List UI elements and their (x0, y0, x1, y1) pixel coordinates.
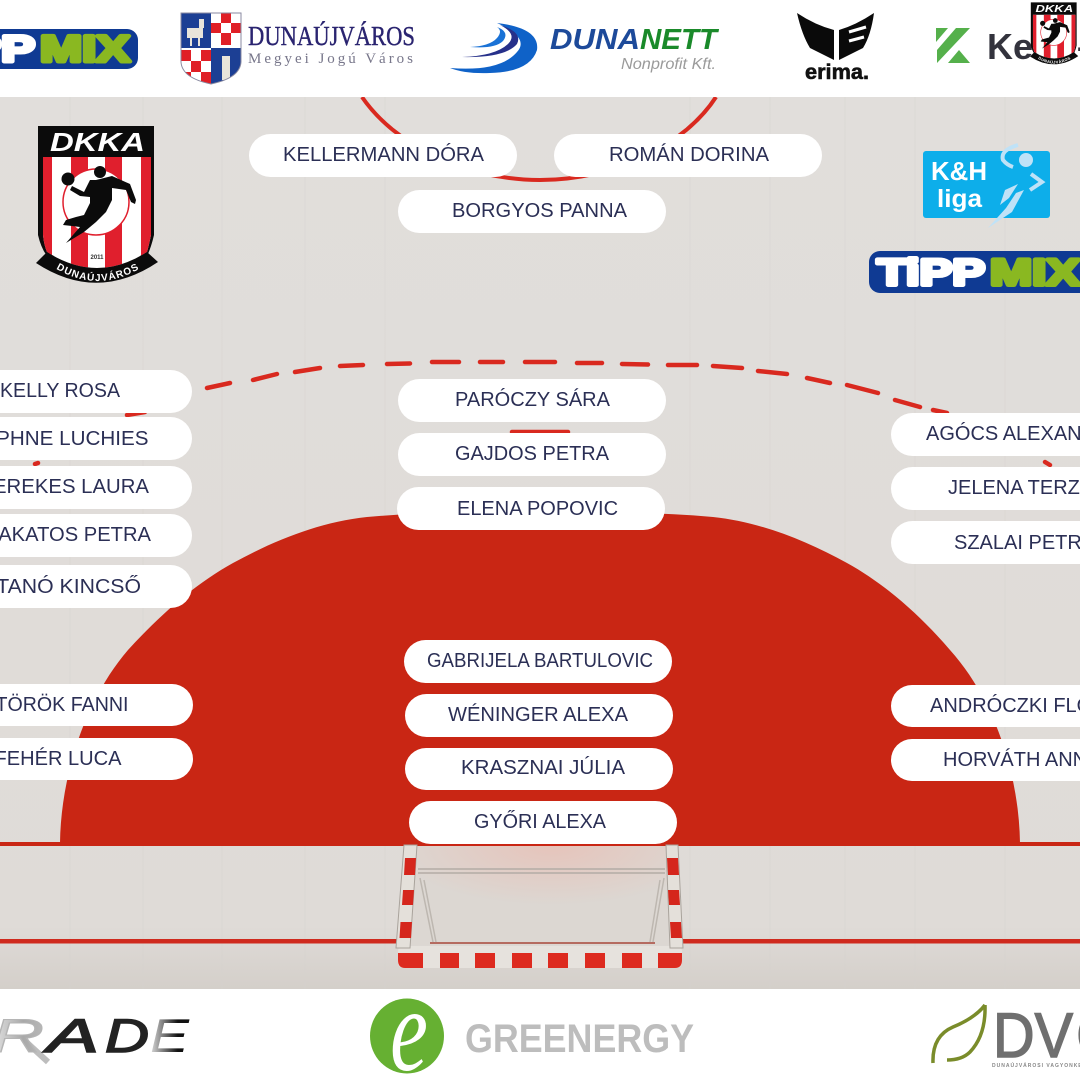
player: Krasznai Júlia (405, 748, 673, 790)
logo: Ke green mark: Ke (987, 26, 1033, 67)
player: Gabrijela Bartulovic (404, 640, 672, 683)
logo: Greenergy wordmark: GREENERGY (465, 1017, 694, 1061)
logo: DVG: DV (993, 1001, 1073, 1071)
bottom sponsor band (0, 965, 1080, 1080)
logo: Tippmix right: TiPP (877, 252, 985, 293)
player: Andróczki Flóra (891, 685, 1080, 727)
logo: Dunanett swoosh (450, 23, 537, 73)
logo: Tippmix right (869, 251, 1080, 293)
logo: Trade: A (42, 1009, 99, 1062)
player: Krasznai Júlia: KRASZNAI JÚLIA (461, 756, 626, 779)
logo: Dunaújváros crest (181, 13, 241, 84)
player: Szerekes Laura (0, 466, 192, 509)
logo: Dunanett wordmark (550, 24, 719, 73)
goal base stripes (398, 953, 682, 968)
player: Fehér Luca (0, 738, 193, 780)
right post (666, 845, 683, 948)
handball goal (396, 845, 683, 968)
player: Paróczy Sára (398, 379, 666, 422)
logo: K&H liga: K&H (931, 156, 987, 186)
dashed free-throw line (35, 362, 1050, 465)
player: Román Dorina (554, 134, 822, 177)
logo: small DKKA badge: DKKA (1036, 4, 1073, 15)
logo: Tippmix top: MIX (40, 28, 130, 70)
player: Kelly Rosa: KELLY ROSA (0, 380, 121, 402)
player: Wéninger Alexa: WÉNINGER ALEXA (448, 703, 629, 726)
logo: Trade (0, 1009, 190, 1062)
logo: small DKKA badge: DUNAÚJVÁROS (1038, 56, 1070, 64)
logo: Erima: erima. (805, 61, 869, 84)
player: Kellermann Dóra: KELLERMANN DÓRA (283, 143, 485, 166)
player: Győri Alexa: GYŐRI ALEXA (474, 810, 607, 833)
player: Agócs Alexandra (891, 413, 1080, 456)
player: Lakatos Petra (0, 514, 192, 557)
logo: Trade: E (150, 1009, 190, 1062)
player: Román Dorina: ROMÁN DORINA (609, 143, 770, 166)
logo: Dunanett wordmark: DUNA (550, 24, 640, 56)
player: Kellermann Dóra (249, 134, 517, 177)
top sponsor band (0, 2, 1080, 97)
player: Szalai Petra (891, 521, 1080, 564)
player: Gajdos Petra: GAJDOS PETRA (455, 443, 610, 465)
player: Paróczy Sára: PARÓCZY SÁRA (455, 388, 611, 411)
player: Kelly Rosa (0, 370, 192, 413)
top goal area arc (362, 97, 716, 180)
logo: small DKKA badge (1030, 2, 1078, 64)
red goal area (60, 512, 1020, 843)
logo: K&H liga: liga (937, 185, 983, 213)
logo: K&H liga (923, 145, 1050, 228)
lower red line (0, 939, 1080, 944)
logo: Dunanett wordmark: NETT (640, 24, 719, 56)
logo: DVG (933, 1001, 1080, 1071)
player: Győri Alexa (409, 801, 677, 844)
player: Wéninger Alexa (405, 694, 673, 737)
logo: Erima (797, 13, 874, 84)
player: Patanó Kincső (0, 565, 192, 608)
player: Borgyos Panna: BORGYOS PANNA (452, 200, 628, 222)
logo: Ke green mark (936, 26, 1080, 67)
player: Daphne Luchies (0, 417, 192, 460)
logo: DKKA club crest (36, 126, 158, 283)
logo: Dunanett wordmark: Nonprofit Kft. (621, 56, 716, 73)
player: Horváth Anna (891, 739, 1080, 781)
logo: Dunaújváros wordmark: Megyei Jogú Város (248, 51, 413, 67)
goal line (0, 842, 1080, 846)
logo: Dunaújváros wordmark: DUNAÚJVÁROS (248, 21, 415, 51)
player: Török Fanni (0, 684, 193, 726)
logo: DKKA club crest: DUNAÚJVÁROS (56, 263, 138, 282)
logo: Dunaújváros wordmark (248, 21, 415, 67)
player: Gajdos Petra (398, 433, 666, 476)
player: Gabrijela Bartulovic: GABRIJELA BARTULOVIC (427, 650, 653, 672)
player: Jelena Terzić (891, 467, 1080, 510)
logo: Tippmix right: MIX (990, 252, 1080, 293)
player: Elena Popovic (397, 487, 665, 530)
player: Elena Popovic: ELENA POPOVIC (457, 498, 618, 520)
logo: Tippmix top (0, 28, 138, 70)
logo: DKKA club crest: DKKA (50, 127, 145, 157)
logo: DKKA club crest: 2011 (90, 255, 104, 261)
player: Borgyos Panna (398, 190, 666, 233)
logo: Greenergy mark (370, 965, 444, 1080)
left post (396, 845, 417, 948)
logo: Trade: D (105, 1009, 149, 1062)
